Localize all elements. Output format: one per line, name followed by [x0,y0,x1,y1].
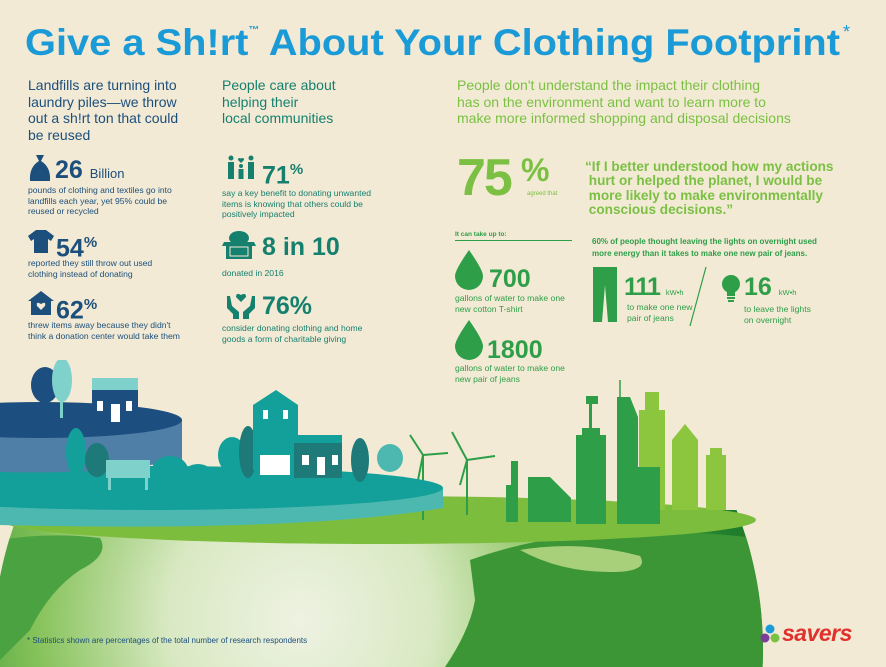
stat: 111 kwh: to make one new [627,302,692,312]
icon: hands heart [227,294,255,319]
title [25,22,850,63]
stat: 26 billion: pounds of clothing and textiles go into [28,185,172,195]
stat: 54%: 54% [56,234,97,262]
stat: 8 in 10: 8 in 10 [262,233,340,261]
scene: globe and town [0,360,763,667]
heading: landfills: out a sh!rt ton that could [28,110,178,126]
stat: 111 kwh: pair of jeans [627,312,674,322]
stat: 1800: new pair of jeans [455,374,520,384]
stat: 1800: 1800 [487,336,543,364]
heading: landfills: Landfills are turning into [28,77,177,93]
heading: impact [457,77,791,126]
icon: bag [30,155,50,181]
stat: 111 kwh: 111 kW•h [624,273,684,301]
stat: 54%: reported they still throw out used [28,258,152,268]
stat: 62%: think a donation center would take them [28,330,180,340]
heading: communities [222,77,336,126]
blue cylinder [0,402,182,472]
heading: impact: People don't understand the impact their clothing [457,77,760,93]
heading: impact: make more informed shopping and disposal decisions [457,110,791,126]
heading: communities: helping their [222,94,298,110]
city buildings [506,380,726,524]
stat: 700: 700 [489,265,531,293]
text: positively impacted [222,209,295,219]
stat: 8 in 10: donated in 2016 [222,268,284,278]
stat: 1800 [455,320,565,384]
stat: 71% [222,156,371,219]
icon: shirt [28,230,54,253]
stat: 75% [457,149,558,207]
globe [0,510,763,667]
logo: savers: savers [782,620,852,646]
quote: conscious decisions.” [589,202,733,217]
stat: 71%: items is knowing that others could be [222,198,363,208]
quote: hurt or helped the planet, I would be [589,173,822,188]
title: Give a Sh!rt [25,22,233,63]
icon: drop [455,320,483,360]
stat: 54%: clothing instead of donating [28,268,133,278]
stat: 8 in 10 [222,231,340,278]
stat: 76% [222,292,362,344]
stat: 62%: 62% [56,296,97,324]
stat: 62%: threw items away because they didn't [28,320,171,330]
icon: jeans [593,267,617,322]
text: 60% lights [592,237,817,258]
stat: 75%: 75 [457,149,511,207]
icon: box [222,231,256,259]
quote: more likely to make environmentally [589,188,823,203]
stat: 700 [455,250,565,314]
heading: communities: local communities [222,110,333,126]
icon: house heart [28,291,54,315]
stat: 700: gallons of water to make one [455,293,565,303]
text: 60% lights: more energy than it takes to make one new pair of jeans. [592,248,807,258]
stat: 16 kwh: on overnight [744,314,791,324]
icon: bulb [722,275,740,302]
text: 60% lights: 60% of people thought leaving the lights on overnight used [592,237,817,246]
icon: drop [455,250,483,290]
stat: 76%: 76% [262,292,312,320]
stat: 111 kwh [593,267,692,322]
label: it can take up to [455,231,572,241]
divider slash [689,266,707,326]
stat: 75%: % [521,152,549,188]
stat: 71%: 71% [262,161,303,189]
stat: 71%: say a key benefit to donating unwanted [222,188,371,198]
heading: communities: People care about [222,77,336,93]
heading: landfills: be reused [28,126,90,142]
title: * [843,22,850,42]
heading: landfills: laundry piles—we throw [28,94,177,110]
stat: 26 billion: 26 Billion [55,156,124,184]
stat: 16 kwh: 16 kW•h [744,273,796,301]
stat: 1800: gallons of water to make one [455,363,565,373]
label: it can take up to: It can take up to: [455,231,507,238]
stat: 62% [28,291,180,340]
stat: 26 billion [28,155,172,216]
quote [585,159,833,217]
stat: 26 billion: reused or recycled [28,206,99,216]
stat: 76%: consider donating clothing and home [222,323,362,333]
houses and trees [31,358,403,490]
stat: 16 kwh: to leave the lights [744,304,811,314]
green ground disk [0,496,756,544]
title: About Your Clothing Footprint [259,22,840,63]
title: ™ [248,25,259,36]
footnote: * Statistics shown are percentages of the total number of research respondents [27,636,307,645]
stat: 26 billion: landfills each year, yet 95% could be [28,196,167,206]
stat: 54% [28,230,152,278]
stat: 700: new cotton T-shirt [455,304,523,314]
stat: 75%: agreed that [527,191,557,197]
stat: 76%: goods a form of charitable giving [222,334,346,344]
heading: impact: has on the environment and want to learn more to [457,94,766,110]
teal disk [0,466,443,527]
icon: family [228,156,254,179]
stat: 16 kwh [722,273,811,324]
quote: “If I better understood how my actions [585,159,833,174]
wind turbines [410,432,495,520]
heading: landfills [28,77,178,142]
